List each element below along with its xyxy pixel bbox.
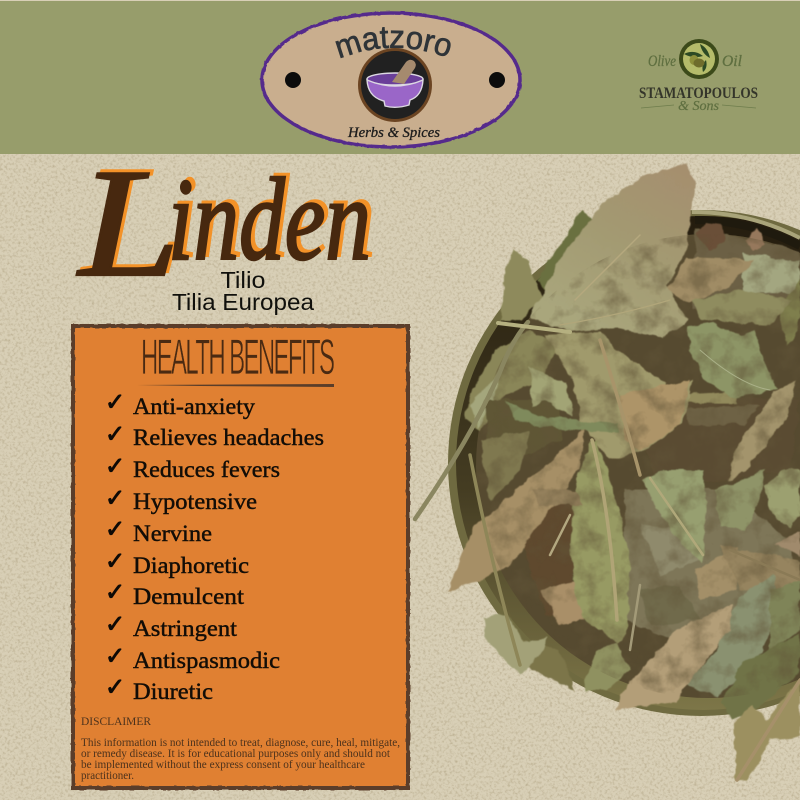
brass bowl: [448, 210, 800, 716]
photo: bowl of dried linden leaves: [415, 162, 800, 780]
back layer leaves: [465, 210, 800, 690]
subtitle: latin name: Tilia Europea: [172, 289, 314, 315]
mounting holes: [285, 72, 505, 88]
title: Linden: [77, 134, 375, 309]
benefit labels: Nervine: [133, 521, 212, 547]
checkmarks: ✓: [105, 388, 125, 416]
disclaimer text: practitioner.: [81, 770, 134, 782]
title brown lettering: inden: [168, 154, 371, 285]
olive script left: Olive: [648, 53, 676, 70]
sons line: & Sons: [678, 98, 719, 113]
disclaimer text: be implemented without the express consent of your healthcare: [81, 759, 365, 771]
disclaimer text: [81, 737, 400, 782]
benefit labels: Anti-anxiety: [133, 394, 255, 420]
checkmarks: ✓: [105, 642, 125, 670]
disclaimer heading: DISCLAIMER: [81, 716, 151, 728]
checkmarks: ✓: [105, 515, 125, 543]
front layer leaves: [530, 162, 800, 780]
matzoro logo: [260, 10, 522, 150]
title orange shadow: inden: [172, 151, 375, 282]
panel heading: HEALTH BENEFITS: [141, 329, 335, 385]
mortar and pestle icon: [358, 48, 432, 122]
checkmarks: ✓: [105, 610, 125, 638]
checkmarks: ✓: [105, 547, 125, 575]
olive emblem: [679, 39, 719, 79]
benefit labels: Reduces fevers: [133, 457, 280, 483]
title orange shadow: [81, 134, 375, 306]
benefit labels: Relieves headaches: [133, 425, 324, 451]
benefit labels: Astringent: [133, 616, 237, 642]
logo oval plaque: [262, 13, 520, 147]
checkmarks: ✓: [105, 420, 125, 448]
benefit labels: Demulcent: [133, 584, 244, 610]
benefits list: [105, 388, 324, 705]
logo name: matzoro: [335, 27, 451, 58]
checkmarks: ✓: [105, 578, 125, 606]
panel: health benefits: [73, 326, 408, 788]
panel background: [73, 326, 408, 788]
header band: [0, 1, 800, 154]
benefit labels: Diaphoretic: [133, 553, 249, 579]
checkmarks: ✓: [105, 673, 125, 701]
benefit labels: Hypotensive: [133, 489, 257, 515]
title brown lettering: [77, 137, 371, 309]
benefit labels: Antispasmodic: [133, 648, 280, 674]
oil script right: Oil: [722, 53, 743, 70]
checkmarks: ✓: [105, 452, 125, 480]
olive oil logo: [639, 39, 758, 113]
checkmarks: [105, 388, 125, 701]
disclaimer text: This information is not intended to treat, diagnose, cure, heal, mitigate,: [81, 737, 400, 749]
heading underline: [137, 384, 334, 387]
mid layer leaves: [447, 323, 800, 697]
stems and veins: [415, 235, 800, 780]
title brown lettering: L: [77, 137, 180, 309]
leaf litter inside bowl: [447, 162, 800, 780]
subtitle: common name: Tilio: [220, 267, 266, 293]
checkmarks: ✓: [105, 484, 125, 512]
disclaimer text: or remedy disease. It is for educational purposes only and should not: [81, 748, 391, 760]
shadow mottling: [476, 234, 800, 698]
benefit labels: [133, 394, 324, 705]
brand name: STAMATOPOULOS: [639, 85, 758, 102]
logo tagline: Herbs & Spices: [347, 125, 440, 141]
title orange shadow: L: [81, 134, 184, 306]
benefit labels: Diuretic: [133, 679, 213, 705]
